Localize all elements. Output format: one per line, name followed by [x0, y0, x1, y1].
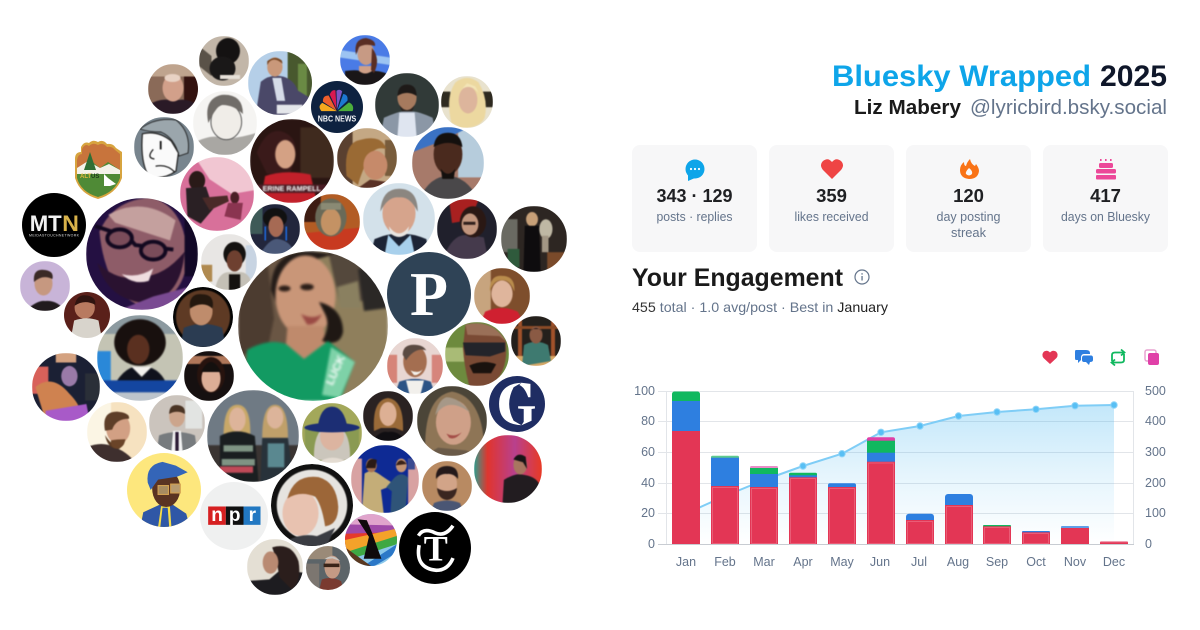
- avatar: couple shaking hands, blue curtain and flags: [351, 445, 419, 513]
- user name and handle: @lyricbird.bsky.social: [970, 97, 1167, 119]
- avatar: woman smiling with large earrings: [201, 234, 257, 290]
- left axis labels: 40: [641, 476, 655, 490]
- icon: Alt US National Park Service badge: US: [91, 174, 99, 180]
- chart grid: [658, 391, 1134, 544]
- avatar: woman in red jacket with glasses: [474, 268, 530, 324]
- panel: streak stat: day posting: [936, 209, 1000, 224]
- left axis labels: [634, 384, 655, 551]
- panel: days on Bluesky stat: [1043, 145, 1168, 252]
- month labels: Jul: [911, 555, 927, 569]
- bar: Oct: [1022, 531, 1050, 544]
- avatar: MTN logo: [22, 193, 86, 257]
- icon: Alt US National Park Service badge: [75, 141, 122, 199]
- avatar: smiling man in blue suit: [387, 338, 443, 394]
- avatar: woman on Washington Post TV segment: ERINE RAMPELL: [263, 185, 321, 193]
- month labels: Mar: [753, 555, 775, 569]
- avatar: bearded man with glasses: [87, 402, 147, 462]
- right axis labels: 400: [1145, 414, 1166, 428]
- icon: chat bubble: [686, 160, 704, 181]
- icon: Alt US National Park Service badge: ALT: [80, 174, 92, 180]
- avatar: cartoon face: [134, 117, 194, 178]
- avatar: smiling man with glasses, purple tint: [86, 198, 198, 310]
- chart: monthly engagement: [634, 384, 1166, 569]
- cumulative line: [686, 402, 1117, 514]
- avatar: woman with orange cat: [32, 353, 100, 421]
- icon: flame: [960, 159, 979, 179]
- avatar: woman with curly hair: [337, 128, 397, 188]
- panel: streak stat: 120: [953, 185, 984, 206]
- right axis labels: [1145, 384, 1166, 551]
- avatar: woman in glasses, red backdrop: [437, 199, 497, 259]
- bar: Jun: [867, 437, 895, 544]
- avatar: NBC News logo: [311, 81, 363, 133]
- avatar: bald man: [148, 64, 199, 114]
- icon: legend reposts: [1112, 350, 1124, 366]
- left axis labels: 0: [648, 537, 655, 551]
- legend icons: [1042, 350, 1159, 366]
- month labels: Sep: [986, 555, 1008, 569]
- avatar: woman in profile with glasses: [247, 539, 303, 595]
- panel: days on Bluesky stat: 417: [1090, 185, 1121, 206]
- right axis labels: 100: [1145, 506, 1166, 520]
- avatar: two women in printed sweaters: [207, 390, 299, 482]
- user name and handle: Liz Mabery: [854, 97, 962, 119]
- avatar: blonde woman: [441, 76, 493, 128]
- panel: posts and replies stat: [632, 145, 757, 252]
- avatar: woman with dark hair and blue earrings: [250, 204, 300, 254]
- panel: likes stat: [769, 145, 894, 252]
- avatar: woman with afro on TV: [97, 315, 183, 401]
- heading: Your Engagement: Your Engagement: [632, 264, 844, 292]
- avatar: man in blazer on dark background: [375, 73, 439, 137]
- avatar: NBC News logo: NBC NEWS: [318, 115, 356, 124]
- month labels: Apr: [793, 555, 813, 569]
- icon: legend replies: [1075, 350, 1093, 365]
- avatar: woman in library: [511, 316, 561, 366]
- avatar: NPR logo: p: [229, 505, 241, 526]
- avatar: The Guardian G logo: [489, 376, 545, 432]
- avatar: MTN logo: N: [62, 211, 79, 236]
- title: Bluesky Wrapped: [832, 60, 1091, 93]
- avatar: black dog: [199, 36, 249, 86]
- avatar: sketch of woman: [193, 91, 257, 155]
- month labels: Nov: [1064, 555, 1087, 569]
- bar: Mar: [750, 466, 778, 544]
- month labels: [676, 555, 1125, 569]
- avatar: short-haired woman on lilac: [20, 261, 70, 311]
- avatar: New York Times T logo: [399, 512, 471, 584]
- icon: legend heart: [1042, 351, 1058, 364]
- left axis labels: 60: [641, 445, 655, 459]
- month labels: Dec: [1103, 555, 1125, 569]
- avatar: woman against blue stripes: [340, 35, 390, 85]
- bar: Jan: [672, 392, 700, 544]
- panel: posts and replies stat: posts · replies: [656, 209, 733, 224]
- icon: heart: [821, 159, 843, 179]
- left axis labels: 80: [641, 414, 655, 428]
- avatar: astronaut in helmet: [304, 194, 360, 250]
- avatar: New York Times T logo: T: [424, 528, 448, 568]
- avatar: man with sunglasses among trees: [445, 322, 509, 386]
- avatar: man against red gradient wall: [474, 435, 542, 503]
- bar: Feb: [711, 456, 739, 544]
- month labels: May: [830, 555, 855, 569]
- month labels: Aug: [947, 555, 969, 569]
- avatar: main woman in green shirt: LUCK: [324, 353, 348, 387]
- avatar: man in gray suit: [149, 395, 205, 451]
- avatar: woman smiling, dark background: [363, 391, 413, 441]
- avatar: woman in blue hat: [302, 403, 362, 463]
- month labels: Feb: [714, 555, 736, 569]
- bar: May: [828, 483, 856, 544]
- user name and handle: [854, 97, 1167, 119]
- right axis labels: 200: [1145, 476, 1166, 490]
- avatar: woman with long gray-brown hair: [417, 386, 487, 456]
- avatar: man in suit at podium: [248, 51, 313, 115]
- cumulative area: [686, 405, 1114, 544]
- month labels: Jan: [676, 555, 696, 569]
- icon: info: [855, 270, 869, 284]
- icon: legend quotes: [1145, 350, 1159, 365]
- panel: likes stat: 359: [816, 185, 847, 206]
- avatar: baby in white: [64, 292, 110, 338]
- icon: cake: [1096, 159, 1116, 180]
- bar: Dec: [1100, 541, 1128, 544]
- bar: Sep: [983, 525, 1011, 544]
- panel: avatar bubble cluster: [20, 35, 567, 595]
- stacked bars: [672, 392, 1128, 544]
- avatar: P logo: P: [410, 261, 448, 329]
- title: 2025: [1100, 60, 1167, 93]
- avatar: MTN logo: MEIDASTOUCHNETWORK: [29, 234, 80, 238]
- avatar: woman holding a dog: [501, 206, 567, 272]
- avatar: MTN logo: MT: [30, 211, 62, 236]
- panel: streak stat: [906, 145, 1031, 252]
- month labels: Oct: [1026, 555, 1046, 569]
- left axis labels: 100: [634, 384, 655, 398]
- engagement summary: 455 total · 1.0 avg/post · Best in January: [632, 299, 888, 315]
- avatar: P logo: [387, 252, 471, 336]
- avatar: main woman in green shirt: [238, 251, 388, 401]
- avatar: NPR logo: r: [249, 505, 257, 526]
- avatar: smiling man, dark ring: [173, 287, 233, 347]
- avatar: man in hoodie against building: [412, 127, 484, 199]
- panel: streak stat: streak: [951, 225, 986, 240]
- bar: Apr: [789, 473, 817, 544]
- avatar: bearded man against brick wall: [422, 461, 472, 511]
- avatar: rainbow flag silhouette: [345, 509, 397, 571]
- avatar: cartoon man in blue cap on yellow: [127, 453, 201, 527]
- right axis labels: 300: [1145, 445, 1166, 459]
- avatar: NPR logo: [200, 482, 268, 550]
- avatar: man with orange sunglasses: [306, 546, 350, 590]
- avatar: woman with auburn bob, black ring: [271, 464, 353, 546]
- panel: posts and replies stat: 343 · 129: [656, 185, 732, 206]
- avatar: NPR logo: n: [211, 505, 223, 526]
- bar: Nov: [1061, 526, 1089, 544]
- bar: Aug: [945, 494, 973, 544]
- bar: Jul: [906, 514, 934, 544]
- avatar: older man in suit: [363, 183, 435, 255]
- avatar: women in pink room: [180, 157, 254, 231]
- avatar: woman on Washington Post TV segment: [250, 119, 334, 203]
- left axis labels: 20: [641, 506, 655, 520]
- panel: days on Bluesky stat: days on Bluesky: [1061, 209, 1150, 224]
- panel: likes stat: likes received: [794, 209, 868, 224]
- month labels: Jun: [870, 555, 890, 569]
- avatar: woman with bangs: [184, 351, 234, 401]
- right axis labels: 0: [1145, 537, 1152, 551]
- right axis labels: 500: [1145, 384, 1166, 398]
